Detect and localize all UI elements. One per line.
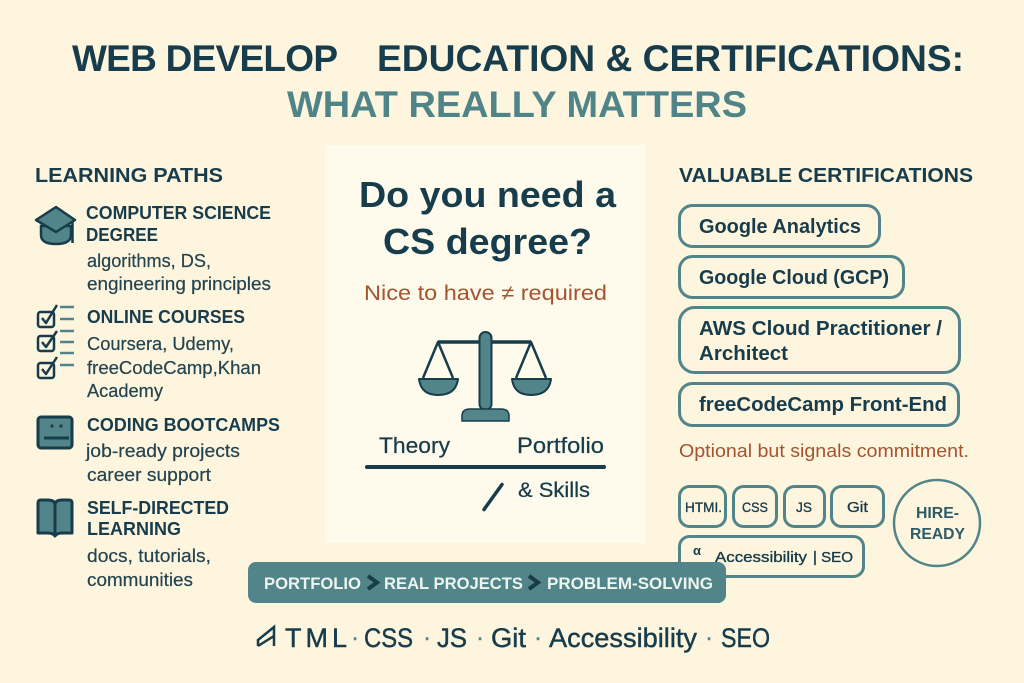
- certification: google cloud: [680, 256, 904, 298]
- path: coding bootcamps: career support: [87, 465, 211, 485]
- panel: learning paths: [35, 165, 280, 590]
- icon: balance scale: [419, 332, 551, 421]
- comparison labels: & Skills: [518, 479, 590, 502]
- question heading: Do you need a: [359, 174, 617, 215]
- certification: aws: [680, 308, 960, 372]
- skills line: CSS: [364, 623, 413, 653]
- skills line: ·: [476, 625, 484, 650]
- banner: portfolio: PROBLEM-SOLVING: [547, 574, 713, 593]
- path: computer science degree: COMPUTER SCIENCE: [86, 203, 271, 223]
- skill tags: α: [693, 543, 701, 558]
- icon: bootcamp screen: [38, 417, 72, 448]
- certification: freecodecamp: freeCodeCamp Front-End: [699, 394, 947, 416]
- path: self-directed learning: SELF-DIRECTED: [87, 498, 229, 518]
- skills line: JS: [437, 623, 467, 653]
- skill tags: Accessibility: [715, 549, 808, 566]
- banner: portfolio: [248, 562, 726, 603]
- path: computer science degree: [86, 203, 271, 294]
- path: online courses: [87, 307, 261, 401]
- skills line: SEO: [721, 623, 770, 653]
- path: self-directed learning: docs, tutorials,: [87, 546, 211, 566]
- path: coding bootcamps: [85, 415, 280, 485]
- certification: google cloud: Google Cloud (GCP): [699, 267, 889, 289]
- question heading: [359, 174, 617, 262]
- path: computer science degree: engineering principles: [87, 274, 271, 294]
- path: coding bootcamps: CODING BOOTCAMPS: [87, 415, 280, 435]
- panel: valuable certifications: [679, 165, 980, 576]
- certification: aws: Architect: [699, 343, 788, 365]
- badge: hire-ready: READY: [910, 526, 965, 543]
- skill tags: Git: [847, 499, 869, 516]
- comparison labels: [367, 433, 604, 510]
- path: computer science degree: algorithms, DS,: [87, 251, 211, 271]
- certification: freecodecamp: [680, 384, 958, 426]
- path: self-directed learning: [87, 498, 229, 590]
- title: WHAT REALLY MATTERS: [287, 84, 747, 125]
- title: EDUCATION & CERTIFICATIONS:: [377, 38, 964, 79]
- icon: checklist: [38, 305, 74, 378]
- skills line: [258, 623, 770, 653]
- question heading: CS degree?: [383, 221, 592, 262]
- comparison labels: Theory: [379, 433, 450, 458]
- skills line: Git: [491, 623, 526, 653]
- subheading: nice to have: Nice to have ≠ required: [364, 282, 607, 305]
- comparison labels: Portfolio: [517, 433, 604, 458]
- path: online courses: freeCodeCamp,Khan: [87, 358, 261, 378]
- certification: google analytics: Google Analytics: [699, 216, 861, 238]
- banner: portfolio: PORTFOLIO: [264, 574, 361, 593]
- path: computer science degree: DEGREE: [86, 225, 158, 245]
- heading: learning paths: LEARNING PATHS: [35, 165, 223, 187]
- path: online courses: Academy: [87, 381, 163, 401]
- icon: broken H glyph: [258, 627, 274, 646]
- panel: do you need a CS degree: [326, 145, 645, 543]
- path: coding bootcamps: job-ready projects: [85, 441, 240, 461]
- path: online courses: ONLINE COURSES: [87, 307, 245, 327]
- banner: portfolio: REAL PROJECTS: [384, 574, 523, 593]
- heading: valuable certifications: VALUABLE CERTIFICATIONS: [679, 165, 973, 187]
- certification: google analytics: [680, 206, 880, 246]
- skill tags: HTMI.: [685, 499, 722, 515]
- icon: open book: [38, 500, 72, 536]
- skills line: TML: [285, 623, 347, 653]
- path: self-directed learning: LEARNING: [87, 519, 181, 539]
- icon: graduation cap: [36, 207, 75, 244]
- skills line: ·: [534, 625, 542, 650]
- skills line: ·: [351, 625, 359, 650]
- title: WEB DEVELOP: [72, 38, 338, 79]
- path: online courses: Coursera, Udemy,: [87, 334, 234, 354]
- badge: hire-ready: HIRE-: [916, 505, 959, 522]
- skills line: ·: [423, 625, 431, 650]
- skill tags: | SEO: [813, 549, 853, 566]
- skill tags: JS: [796, 499, 812, 515]
- title: [72, 38, 964, 125]
- skills line: ·: [705, 625, 713, 650]
- skill tags: [680, 486, 884, 576]
- note: optional: Optional but signals commitment.: [679, 441, 969, 461]
- certification: aws: AWS Cloud Practitioner /: [699, 318, 942, 340]
- skill tags: CSS: [742, 499, 768, 515]
- skills line: Accessibility: [549, 623, 697, 653]
- badge: hire-ready: [894, 480, 980, 566]
- path: self-directed learning: communities: [87, 570, 193, 590]
